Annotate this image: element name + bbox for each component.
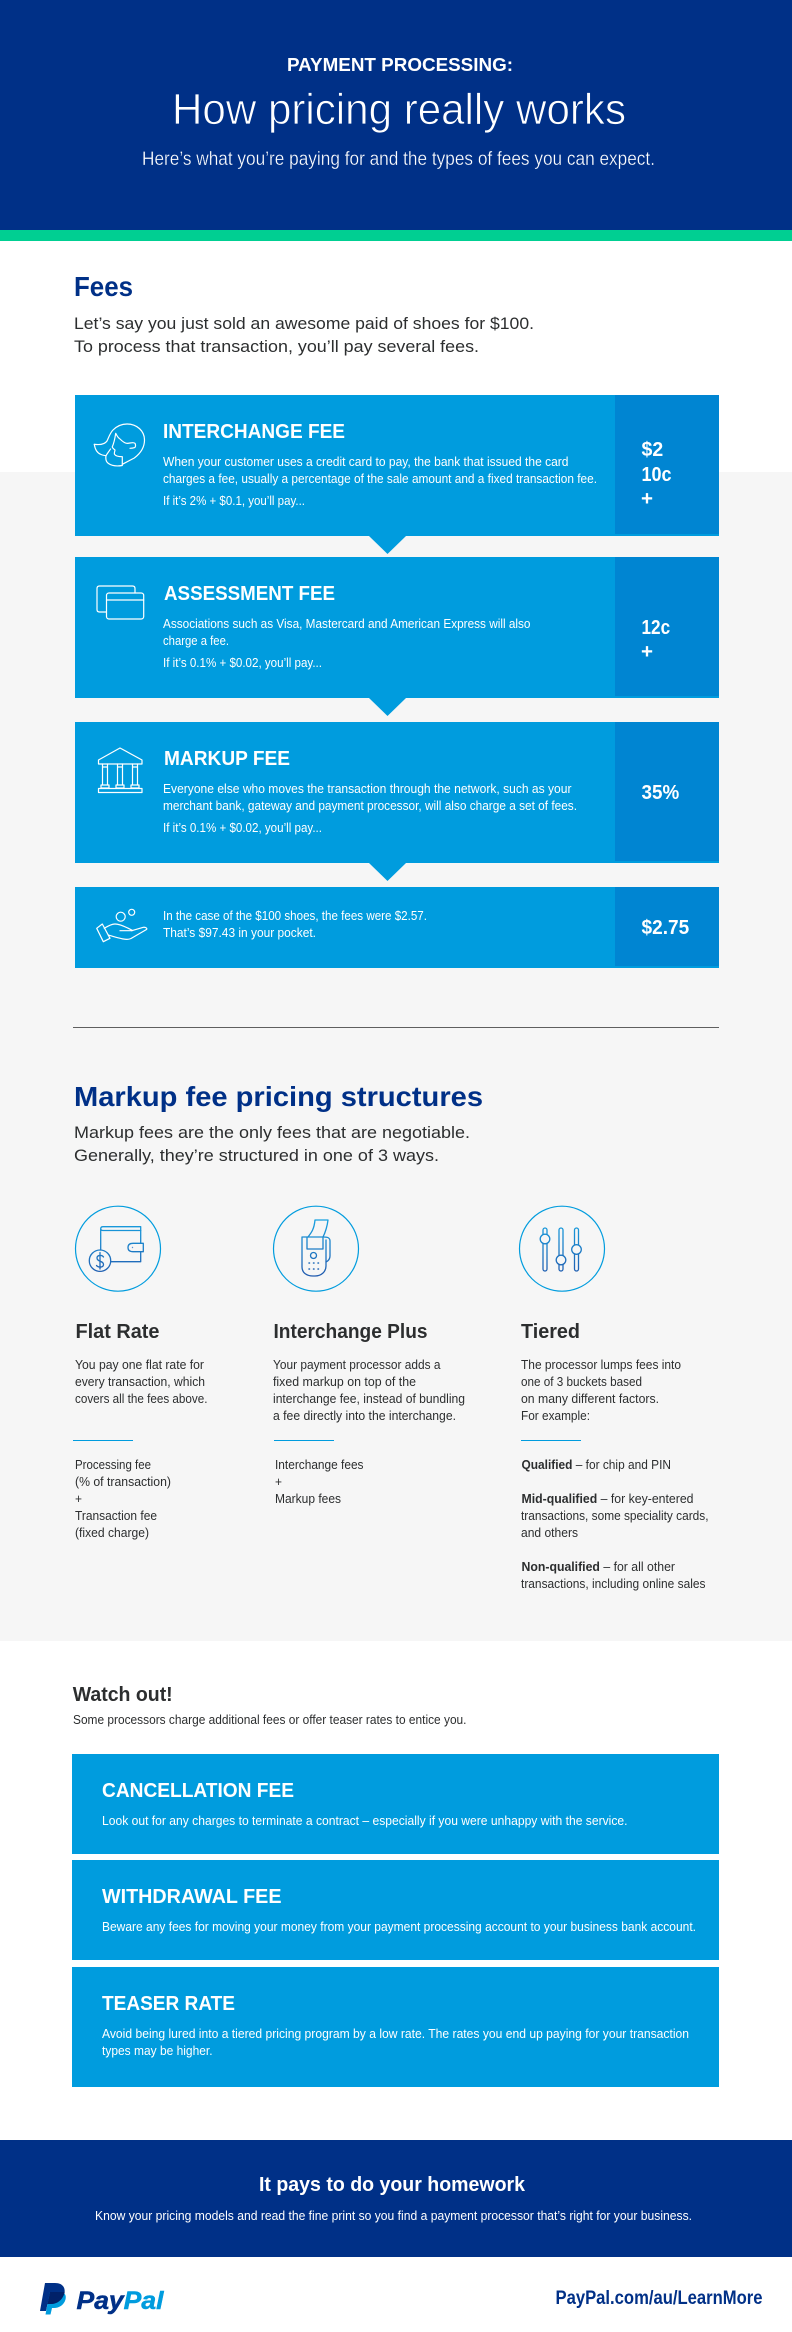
formula <box>275 1458 364 1506</box>
fee amount: 10c <box>642 464 672 486</box>
description <box>163 455 597 508</box>
heading: Interchange Plus <box>274 1321 428 1343</box>
description: If it’s 0.1% + $0.02, you’ll pay... <box>163 656 322 670</box>
heading: fees: Fees <box>74 271 133 302</box>
formula: Interchange fees <box>275 1458 364 1472</box>
formula <box>75 1458 171 1540</box>
tier list: Qualified – for chip and PIN <box>522 1458 671 1472</box>
watch out intro: Some processors charge additional fees or offer teaser rates to entice you. <box>73 1713 466 1727</box>
description <box>521 1358 681 1423</box>
subtitle: Here’s what you’re paying for and the types of fees you can expect. <box>142 149 655 170</box>
description: merchant bank, gateway and payment processor, will also charge a set of fees. <box>163 799 577 813</box>
fee amount: + <box>641 641 653 663</box>
icon: paypal mark <box>40 2283 66 2314</box>
header banner <box>0 0 792 241</box>
icon: cards <box>97 586 144 619</box>
panel: total <box>75 887 719 968</box>
description <box>163 782 577 835</box>
icon: bank <box>98 748 142 792</box>
total description: That’s $97.43 in your pocket. <box>163 926 316 940</box>
description: types may be higher. <box>102 2044 213 2058</box>
paypal logo <box>40 2283 165 2315</box>
tier list: and others <box>521 1526 578 1540</box>
heading: WITHDRAWAL FEE <box>102 1886 282 1908</box>
closing heading: It pays to do your homework <box>259 2174 526 2196</box>
heading: INTERCHANGE FEE <box>163 421 345 443</box>
fee amount <box>641 617 670 663</box>
heading: TEASER RATE <box>102 1993 235 2015</box>
description: Your payment processor adds a <box>273 1358 441 1372</box>
website link: PayPal.com/au/LearnMore <box>556 2288 762 2309</box>
description: The processor lumps fees into <box>521 1358 681 1372</box>
icon: sliders <box>520 1206 604 1291</box>
fees intro text: Let’s say you just sold an awesome paid of shoes for $100. <box>74 314 534 333</box>
panel: interchange plus <box>273 1206 465 1506</box>
description <box>102 2027 689 2058</box>
tier list: transactions, some speciality cards, <box>521 1509 708 1523</box>
description: Look out for any charges to terminate a contract – especially if you were unhappy with the service. <box>102 1814 628 1828</box>
formula: + <box>75 1492 82 1506</box>
heading: Flat Rate <box>76 1321 160 1343</box>
description: fixed markup on top of the <box>273 1375 416 1389</box>
fee amount: 12c <box>642 617 670 639</box>
description: charge a fee. <box>163 634 229 648</box>
heading: markup fee pricing structures: Markup fee pricing structures <box>74 1081 483 1112</box>
formula: Markup fees <box>275 1492 341 1506</box>
formula: (% of transaction) <box>75 1475 171 1489</box>
description: charges a fee, usually a percentage of the sale amount and a fixed transaction fee. <box>163 472 597 486</box>
total description <box>163 909 427 940</box>
fees intro text <box>74 314 534 356</box>
fee amount: $2 <box>642 439 663 461</box>
tier list: Non-qualified – for all other <box>522 1560 675 1574</box>
panel: tiered <box>520 1206 708 1591</box>
formula: (fixed charge) <box>75 1526 149 1540</box>
heading: watch out: Watch out! <box>73 1684 173 1706</box>
heading: Tiered <box>521 1321 580 1343</box>
description: a fee directly into the interchange. <box>273 1409 456 1423</box>
description: You pay one flat rate for <box>75 1358 204 1372</box>
panel: flat rate <box>73 1206 208 1540</box>
description: Associations such as Visa, Mastercard and American Express will also <box>163 617 531 631</box>
description <box>75 1358 208 1406</box>
icon: wallet <box>76 1206 160 1291</box>
heading: ASSESSMENT FEE <box>164 583 335 605</box>
description: When your customer uses a credit card to pay, the bank that issued the card <box>163 455 569 469</box>
tier list: Mid-qualified – for key-entered <box>522 1492 694 1506</box>
heading: MARKUP FEE <box>164 748 290 770</box>
tier list: transactions, including online sales <box>521 1577 706 1591</box>
description: Everyone else who moves the transaction through the network, such as your <box>163 782 572 796</box>
description: covers all the fees above. <box>75 1392 208 1406</box>
fee amount: + <box>641 488 653 510</box>
wordmark: PayPal <box>76 2287 165 2315</box>
markup intro text <box>74 1123 470 1165</box>
description: every transaction, which <box>75 1375 205 1389</box>
title: How pricing really works <box>172 85 626 134</box>
description: For example: <box>521 1409 590 1423</box>
heading: CANCELLATION FEE <box>102 1780 294 1802</box>
panel: assessment fee <box>75 557 719 716</box>
description: Avoid being lured into a tiered pricing program by a low rate. The rates you end up paying for your transaction <box>102 2027 689 2041</box>
tier list <box>521 1458 708 1591</box>
panel: interchange fee <box>75 395 719 554</box>
total description: In the case of the $100 shoes, the fees were $2.57. <box>163 909 427 923</box>
panel: cancellation fee <box>72 1754 719 1854</box>
closing text: Know your pricing models and read the fine print so you find a payment processor that’s right for your business. <box>95 2209 692 2223</box>
markup intro text: Markup fees are the only fees that are negotiable. <box>74 1123 470 1142</box>
panel: teaser rate <box>72 1967 719 2087</box>
formula: Processing fee <box>75 1458 151 1472</box>
description: one of 3 buckets based <box>521 1375 642 1389</box>
header kicker: PAYMENT PROCESSING: <box>287 55 513 75</box>
panel: withdrawal fee <box>72 1860 719 1960</box>
description: interchange fee, instead of bundling <box>273 1392 465 1406</box>
description <box>273 1358 465 1423</box>
formula: + <box>275 1475 282 1489</box>
fee amount: 35% <box>642 782 679 804</box>
description: If it’s 0.1% + $0.02, you’ll pay... <box>163 821 322 835</box>
description: If it’s 2% + $0.1, you’ll pay... <box>163 494 305 508</box>
icon: card terminal <box>274 1206 358 1291</box>
fee amount <box>641 439 672 510</box>
closing banner <box>0 2140 792 2257</box>
description: on many different factors. <box>521 1392 659 1406</box>
icon: customer face <box>94 424 144 466</box>
icon: hand with coins <box>97 909 147 942</box>
description <box>163 617 531 670</box>
total amount: $2.75 <box>642 917 689 939</box>
panel: markup fee <box>75 722 719 881</box>
formula: Transaction fee <box>75 1509 157 1523</box>
description: Beware any fees for moving your money from your payment processing account to your business bank account. <box>102 1920 696 1934</box>
fees intro text: To process that transaction, you’ll pay several fees. <box>74 337 479 356</box>
markup intro text: Generally, they’re structured in one of 3 ways. <box>74 1146 439 1165</box>
